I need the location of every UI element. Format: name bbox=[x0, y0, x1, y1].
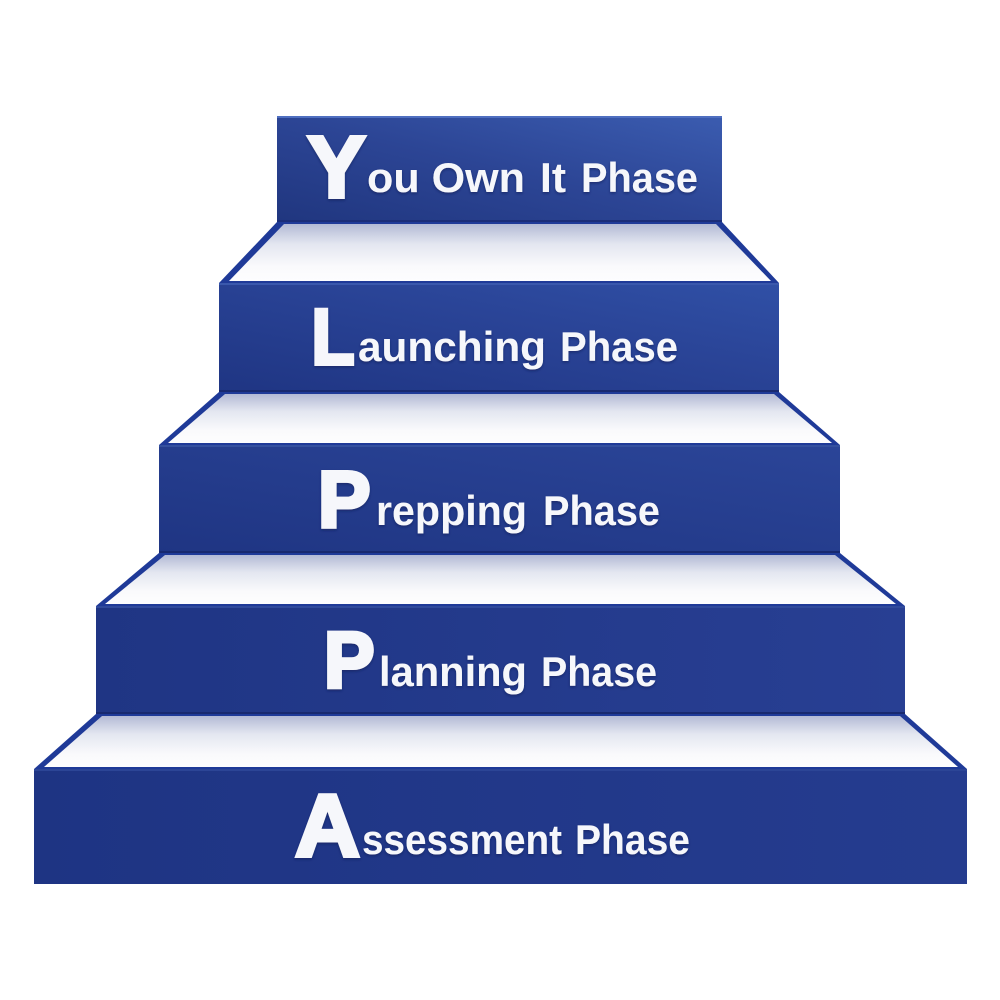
label: You Own It Phase: Phase bbox=[581, 154, 698, 201]
label: Prepping Phase bbox=[318, 455, 660, 544]
label: Launching Phase: L bbox=[312, 292, 354, 381]
label: Planning Phase: Phase bbox=[541, 648, 657, 695]
label: You Own It Phase bbox=[308, 119, 698, 216]
label: Planning Phase: lanning bbox=[379, 648, 527, 695]
step 5 tread: below Planning bbox=[34, 714, 967, 769]
riser: You Own It Phase bbox=[277, 116, 722, 222]
label: Launching Phase bbox=[312, 292, 678, 381]
label: Assessment Phase: ssessment bbox=[362, 816, 562, 863]
label: Prepping Phase: P bbox=[318, 455, 370, 544]
label: Assessment Phase bbox=[295, 776, 690, 875]
label: You Own It Phase: Y bbox=[308, 119, 366, 216]
label: Launching Phase: aunching bbox=[358, 323, 546, 370]
label: Assessment Phase: Phase bbox=[575, 816, 690, 863]
riser: Launching Phase bbox=[219, 283, 779, 392]
label: You Own It Phase: It bbox=[540, 154, 566, 201]
step 4 tread: below Prepping bbox=[96, 553, 905, 606]
step 3 tread: below Launching bbox=[159, 392, 840, 445]
label: Planning Phase: P bbox=[324, 615, 374, 704]
riser: Assessment Phase bbox=[34, 769, 967, 884]
riser: Planning Phase bbox=[96, 606, 905, 714]
step 2 tread: below You Own It bbox=[219, 222, 779, 283]
label: Prepping Phase: repping bbox=[376, 487, 527, 534]
label: You Own It Phase: ou Own bbox=[367, 154, 525, 201]
label: Launching Phase: Phase bbox=[560, 323, 678, 370]
label: Assessment Phase: A bbox=[295, 776, 360, 875]
riser: Prepping Phase bbox=[159, 445, 840, 553]
label: Prepping Phase: Phase bbox=[543, 487, 660, 534]
label: Planning Phase bbox=[324, 615, 657, 704]
